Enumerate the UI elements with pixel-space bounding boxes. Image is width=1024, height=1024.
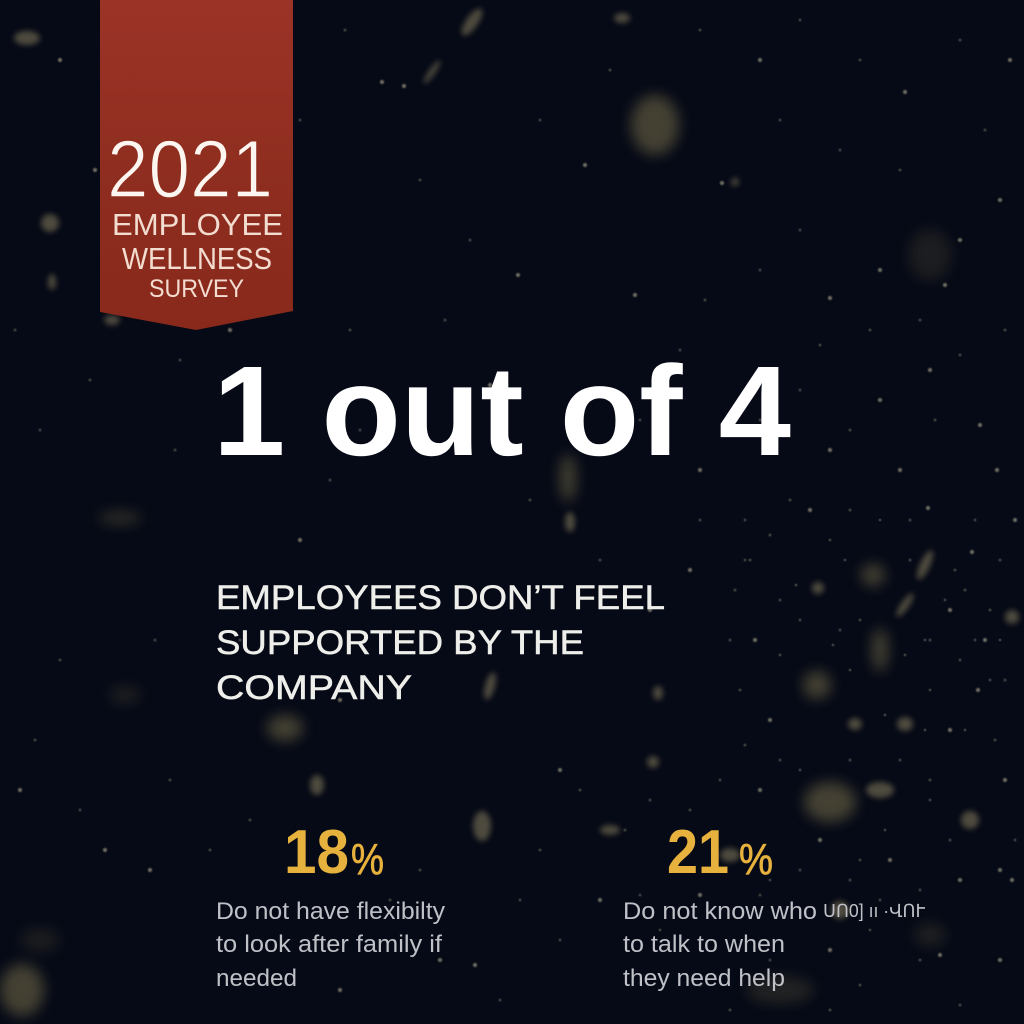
text: 18 percent description: to look after family if bbox=[216, 931, 442, 958]
badge label bbox=[112, 207, 283, 303]
text: 18 percent description: needed bbox=[216, 965, 297, 992]
text: 18 percent description bbox=[216, 898, 445, 992]
stat: 18 percent bbox=[284, 818, 384, 887]
ribbon shape bbox=[100, 0, 293, 330]
text: 21 percent description: they need help bbox=[623, 965, 785, 992]
stat: 18 percent: 18 bbox=[284, 818, 349, 887]
stat: 21 percent bbox=[667, 818, 773, 887]
year: 2021 bbox=[107, 124, 273, 215]
stat: 18 percent: % bbox=[351, 835, 384, 884]
subheading: SUPPORTED BY THE bbox=[216, 624, 584, 662]
subheading: EMPLOYEES DON’T FEEL bbox=[216, 579, 665, 617]
text: 18 percent description: Do not have flexibilty bbox=[216, 898, 445, 925]
badge label: EMPLOYEE bbox=[112, 207, 283, 242]
subheading: COMPANY bbox=[216, 669, 412, 707]
stat: 21 percent: 21 bbox=[667, 818, 729, 887]
text: 21 percent description: Do not know who bbox=[623, 898, 817, 925]
stat: 21 percent: % bbox=[739, 835, 773, 884]
subheading bbox=[216, 579, 665, 707]
text: 21 percent description: to talk to when bbox=[623, 931, 785, 958]
text: 21 percent description bbox=[623, 898, 925, 992]
ribbon: survey badge bbox=[100, 0, 293, 330]
text: 21 percent description: ՍՈ0] ıı ·ՎՈՒ bbox=[823, 901, 925, 921]
headline statistic: 1 out of 4 bbox=[213, 340, 791, 483]
badge label: SURVEY bbox=[149, 275, 244, 303]
badge label: WELLNESS bbox=[122, 241, 272, 276]
